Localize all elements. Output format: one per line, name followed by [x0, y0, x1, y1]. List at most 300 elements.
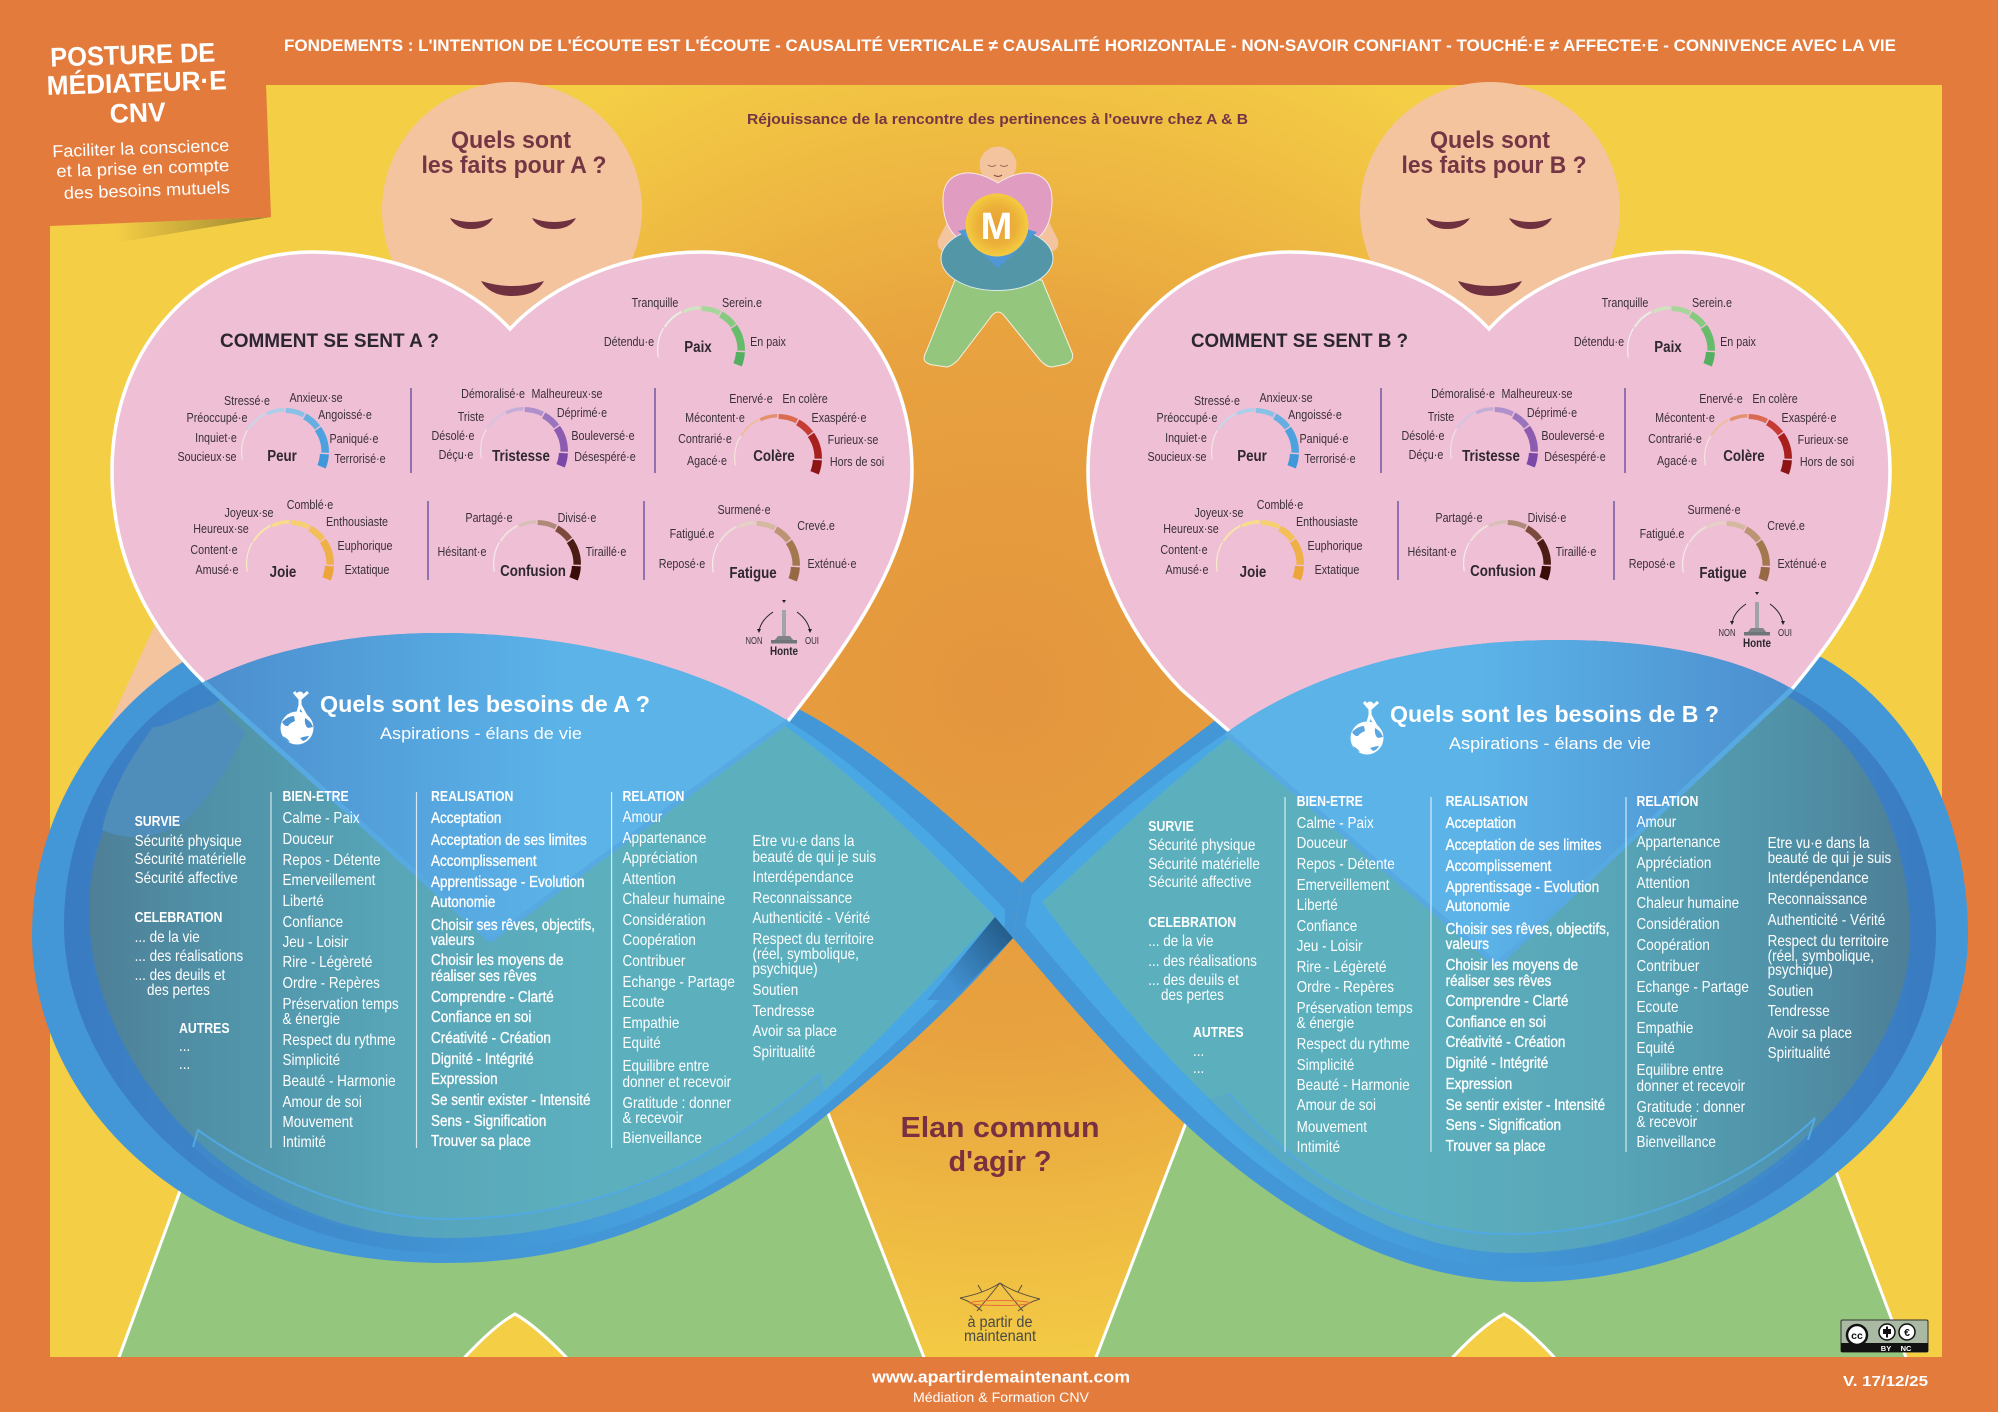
gauge: Peur: Peur	[267, 448, 297, 465]
gauge: Honte: Honte	[770, 646, 798, 658]
needs A: réalisation: Acceptation	[431, 810, 501, 827]
icon: person on globe A	[280, 692, 314, 744]
needs B: bien-être: Calme - Paix	[1297, 815, 1374, 832]
needs B: bien-être: Jeu - Loisir	[1297, 938, 1363, 955]
loop B inner area	[1042, 650, 1910, 1253]
needs A: réalisation: Acceptation de ses limites	[431, 832, 587, 849]
gauge: Tristesse B: Déçu·e	[1409, 448, 1443, 462]
gauge: Joie: Heureux·se	[193, 522, 249, 536]
needs A: bien-être: Respect du rythme	[282, 1032, 396, 1049]
footer: tagline: Médiation & Formation CNV	[913, 1390, 1089, 1405]
gauge: Peur B: Inquiet·e	[1165, 431, 1207, 445]
icon: M badge: M	[981, 206, 1012, 248]
gauge: Colère B: Agacé·e	[1657, 454, 1697, 468]
heart B contents	[1147, 296, 1854, 650]
needs A: réalisation: Se sentir exister - Intensité	[431, 1092, 591, 1109]
needs A: bien-être: Rire - Légèreté	[282, 954, 372, 971]
licence badge	[1841, 1320, 1928, 1353]
loop B outer band	[1013, 640, 1968, 1282]
needs A: relation suite: Etre vu·e dans la	[752, 833, 855, 850]
gauge: Joie: Content·e	[190, 543, 238, 557]
needs A: réalisation: Sens - Signification	[431, 1113, 546, 1130]
gauge: Colère: Exaspéré·e	[812, 411, 866, 425]
gauge: Peur: Stressé·e	[224, 394, 270, 408]
needs A: réalisation: Choisir ses rêves, objectifs,	[431, 917, 595, 934]
gauge: Honte: NON	[746, 636, 762, 647]
needs A: bien-être: Intimité	[282, 1134, 326, 1151]
needs A dividers	[271, 792, 612, 1148]
needs B: réalisation: REALISATION	[1446, 793, 1528, 809]
needs B: relation: Amour	[1636, 814, 1676, 831]
gauge: Paix B: En paix	[1720, 335, 1756, 349]
needs A: réalisation: Autonomie	[431, 894, 495, 911]
needs B: bien-être: Douceur	[1297, 835, 1348, 852]
heading: comment se sent A: COMMENT SE SENT A ?	[220, 331, 439, 352]
needs B: relation suite: Interdépendance	[1768, 870, 1869, 887]
needs A: réalisation: REALISATION	[431, 788, 513, 804]
gauge: Joie B: Joyeux·se	[1195, 506, 1243, 520]
lens V stripes	[204, 682, 1792, 965]
needs B: relation: RELATION	[1636, 793, 1698, 809]
gauge: Tristesse B: Tristesse	[1462, 448, 1520, 465]
gauge: Confusion: Confusion	[500, 563, 566, 580]
ribbon line A	[193, 1074, 823, 1219]
gauge: Colère B: Furieux·se	[1798, 433, 1848, 447]
gauge: Confusion: Partagé·e	[465, 511, 513, 525]
needs A: survie, célébration, autres: Sécurité matérielle	[135, 851, 246, 868]
needs A: survie, célébration, autres: Sécurité affective	[135, 870, 238, 887]
gauge: Tristesse: Déçu·e	[439, 448, 473, 462]
gauge: Joie: Enthousiaste	[326, 515, 388, 529]
gauge: Colère: Contrarié·e	[678, 432, 732, 446]
needs A: bien-être: Ordre - Repères	[282, 975, 380, 992]
question: faits B	[1402, 127, 1586, 179]
subheading: aspirations B: Aspirations - élans de vie	[1449, 734, 1651, 753]
needs A: bien-être: Mouvement	[282, 1114, 353, 1131]
gauge: Paix: Tranquille	[632, 296, 678, 310]
gauge: Peur B: Stressé·e	[1194, 394, 1240, 408]
gauge: Peur: Angoissé·e	[318, 408, 372, 422]
figure B: head	[1360, 82, 1620, 338]
needs A: réalisation: Accomplissement	[431, 853, 537, 870]
needs B: survie, célébration, autres: ...	[1193, 1043, 1204, 1060]
needs A: relation suite: Interdépendance	[752, 869, 854, 886]
gauge: Joie: Joie	[270, 564, 296, 581]
gauge: Fatigue B: Exténué·e	[1778, 557, 1826, 571]
needs B: réalisation: Confiance en soi	[1446, 1014, 1546, 1031]
licence badge: €	[1904, 1327, 1910, 1339]
needs B: bien-être: Préservation temps	[1297, 1000, 1413, 1017]
gauge: Confusion B: Tiraillé·e	[1556, 545, 1596, 559]
gauge: Peur B	[1147, 391, 1356, 467]
badge subtitle	[52, 136, 230, 203]
gauge: Peur B: Paniqué·e	[1300, 432, 1348, 446]
gauge: Joie: Comblé·e	[287, 498, 333, 512]
needs A: relation: Attention	[622, 871, 676, 888]
figure A: head	[107, 82, 642, 729]
shadow of arm in loop A	[102, 703, 245, 837]
gauge: Colère B	[1648, 392, 1854, 473]
gauge: Tristesse: Malheureux·se	[531, 387, 603, 401]
needs A: relation: donner et recevoir	[622, 1074, 731, 1091]
needs B: survie, célébration, autres: ... de la vie	[1148, 933, 1213, 950]
needs B: réalisation: Acceptation de ses limites	[1446, 837, 1601, 854]
needs B: réalisation	[1446, 793, 1610, 1155]
needs A: bien-être: Calme - Paix	[282, 810, 360, 827]
figure A: green legs	[118, 940, 925, 1360]
ribbon band A	[193, 1074, 825, 1238]
gauge: Colère: Mécontent·e	[685, 411, 745, 425]
needs B: relation: Considération	[1636, 916, 1720, 933]
needs A: survie, célébration, autres: des pertes	[147, 982, 210, 999]
gauge: Honte	[746, 600, 819, 658]
needs A: bien-être: Douceur	[282, 831, 334, 848]
gauge: Joie: Extatique	[345, 563, 389, 577]
needs B: relation: & recevoir	[1636, 1114, 1697, 1131]
needs A: relation: Bienveillance	[622, 1130, 702, 1147]
needs B: réalisation: réaliser ses rêves	[1446, 973, 1551, 990]
gauge: Fatigue B: Reposé·e	[1629, 557, 1675, 571]
gauge: Tristesse B: Déprimé·e	[1527, 406, 1577, 420]
heading: besoins A: Quels sont les besoins de A ?	[320, 691, 650, 717]
needs B: survie, célébration, autres: CELEBRATION	[1148, 914, 1236, 930]
gauge: Colère	[678, 392, 884, 473]
question: faits B: Quels sont	[1430, 127, 1550, 154]
needs B: réalisation: Choisir les moyens de	[1446, 957, 1578, 974]
needs B: relation: Ecoute	[1636, 999, 1678, 1016]
needs B: relation suite: Tendresse	[1768, 1003, 1830, 1020]
gauge: Paix: Détendu·e	[604, 335, 654, 349]
needs B: bien-être: Repos - Détente	[1297, 856, 1395, 873]
needs B: réalisation: Trouver sa place	[1446, 1138, 1545, 1155]
gauge: Tristesse: Bouleversé·e	[571, 429, 635, 443]
needs A: réalisation: Expression	[431, 1071, 498, 1088]
ribbon line B	[1229, 1093, 1815, 1234]
needs B: bien-être: & énergie	[1297, 1015, 1354, 1032]
needs A: réalisation: Apprentissage - Evolution	[431, 874, 585, 891]
needs A: survie, célébration, autres	[135, 813, 246, 1073]
gauge: Tristesse B: Malheureux·se	[1501, 387, 1573, 401]
gauge: Joie B: Heureux·se	[1163, 522, 1219, 536]
needs B: relation: Appartenance	[1636, 834, 1720, 851]
needs A: relation: & recevoir	[622, 1110, 683, 1127]
headline: réjouissance: Réjouissance de la rencontre des pertinences à l'oeuvre chez A & B	[747, 111, 1248, 128]
gauge: Confusion	[438, 511, 626, 580]
gauge: Joie B: Extatique	[1315, 563, 1359, 577]
needs B: survie, célébration, autres	[1148, 818, 1260, 1077]
question: faits B: les faits pour B ?	[1402, 152, 1586, 179]
question: élan commun	[900, 1112, 1100, 1178]
needs B: bien-être: Emerveillement	[1297, 877, 1389, 894]
gauge: Peur	[177, 391, 386, 467]
gauge: Peur: Préoccupé·e	[187, 411, 247, 425]
needs A: relation: Appartenance	[622, 830, 706, 847]
gauge: Colère B: Hors de soi	[1800, 455, 1854, 469]
needs A: relation	[622, 788, 735, 1147]
licence badge: BY	[1881, 1344, 1891, 1353]
question: faits A: les faits pour A ?	[422, 152, 606, 179]
gauge: Fatigue: Exténué·e	[808, 557, 856, 571]
gauge: Tristesse B: Démoralisé·e	[1431, 387, 1495, 401]
needs B: survie, célébration, autres: Sécurité physique	[1148, 837, 1255, 854]
needs B: réalisation: Accomplissement	[1446, 858, 1551, 875]
gauge: Peur: Soucieux·se	[177, 450, 237, 464]
gauge: Colère B: Exaspéré·e	[1782, 411, 1836, 425]
gauge: Colère B: Mécontent·e	[1655, 411, 1715, 425]
gauge: Peur B: Soucieux·se	[1147, 450, 1207, 464]
gauge: Confusion: Tiraillé·e	[586, 545, 626, 559]
gauge: Colère: Enervé·e	[729, 392, 773, 406]
needs A: relation: Gratitude : donner	[622, 1095, 731, 1112]
needs B: bien-être: Ordre - Repères	[1297, 979, 1394, 996]
needs A: relation suite: Reconnaissance	[752, 890, 852, 907]
needs A: bien-être: Beauté - Harmonie	[282, 1073, 396, 1090]
gauge: Joie B: Euphorique	[1308, 539, 1362, 553]
needs B: réalisation: valeurs	[1446, 936, 1489, 953]
gauge: Tristesse: Démoralisé·e	[461, 387, 525, 401]
gauge: Fatigue: Crevé.e	[797, 519, 835, 533]
needs B: survie, célébration, autres: AUTRES	[1193, 1024, 1244, 1040]
heart A	[112, 252, 912, 940]
loop A inner area	[89, 640, 995, 1238]
gauge: Joie B: Comblé·e	[1257, 498, 1303, 512]
gauge: Joie: Joyeux·se	[225, 506, 273, 520]
needs B: bien-être: Beauté - Harmonie	[1297, 1077, 1410, 1094]
needs B: réalisation: Apprentissage - Evolution	[1446, 879, 1599, 896]
needs A: relation: Contribuer	[622, 953, 686, 970]
needs B: relation: Equité	[1636, 1040, 1675, 1057]
heading: besoins B: Quels sont les besoins de B ?	[1390, 701, 1719, 727]
needs B: survie, célébration, autres: SURVIE	[1148, 818, 1194, 834]
gauge: Colère B: Colère	[1723, 448, 1765, 465]
gauge: Paix B	[1574, 296, 1756, 365]
needs B: relation: Echange - Partage	[1636, 979, 1749, 996]
gauge dividers	[411, 388, 655, 580]
needs A: relation suite: Avoir sa place	[752, 1023, 837, 1040]
licence badge: cc	[1851, 1330, 1863, 1342]
gauge: Paix: Paix	[684, 339, 712, 356]
heart A contents	[177, 296, 884, 658]
needs A: relation suite: Soutien	[752, 982, 798, 999]
gauge: Joie	[190, 498, 392, 581]
needs A: bien-être: Préservation temps	[282, 996, 399, 1013]
needs A: réalisation: Choisir les moyens de	[431, 952, 564, 969]
gauge: Confusion B: Partagé·e	[1435, 511, 1483, 525]
needs B: bien-être: Mouvement	[1297, 1119, 1367, 1136]
gauge: Paix B: Tranquille	[1602, 296, 1648, 310]
needs B: réalisation: Autonomie	[1446, 898, 1510, 915]
logo: à partir de maintenant: maintenant	[964, 1328, 1037, 1345]
needs A: bien-être	[282, 788, 399, 1151]
mediator figure	[924, 146, 1073, 367]
gauge: Joie: Euphorique	[338, 539, 392, 553]
needs A: survie, célébration, autres: AUTRES	[179, 1020, 230, 1036]
needs B: survie, célébration, autres: ... des deuils et	[1148, 972, 1239, 989]
gauge: Fatigue: Surmené·e	[717, 503, 771, 517]
gauge: Paix B: Paix	[1654, 339, 1682, 356]
needs A: relation suite: Respect du territoire	[752, 931, 874, 948]
figure B: gap between legs	[1453, 1314, 1554, 1360]
badge title: MÉDIATEUR·E	[46, 64, 227, 101]
needs B: relation suite: Respect du territoire	[1768, 933, 1889, 950]
needs B: relation suite: Soutien	[1768, 983, 1813, 1000]
needs B: relation suite: psychique)	[1768, 962, 1833, 979]
needs B: relation: Bienveillance	[1636, 1134, 1716, 1151]
badge subtitle: des besoins mutuels	[64, 178, 230, 203]
needs A: survie, célébration, autres: ... des deuils et	[135, 967, 225, 984]
top fold shadow	[115, 217, 271, 243]
gauge: Fatigue B: Surmené·e	[1687, 503, 1741, 517]
gauge: Paix B: Détendu·e	[1574, 335, 1624, 349]
gauge: Joie B	[1160, 498, 1362, 581]
needs A: réalisation: Dignité - Intégrité	[431, 1051, 534, 1068]
question: élan commun: d'agir ?	[948, 1146, 1052, 1178]
gauge: Honte B: OUI	[1778, 628, 1792, 639]
gauge: Peur: Terrorisé·e	[334, 452, 386, 466]
needs A: bien-être: Repos - Détente	[282, 852, 381, 869]
needs B: bien-être: BIEN-ETRE	[1297, 793, 1363, 809]
gauge: Confusion B	[1408, 511, 1596, 580]
badge title: CNV	[109, 97, 166, 129]
needs A: relation: Coopération	[622, 932, 696, 949]
needs B: relation suite: Etre vu·e dans la	[1768, 835, 1870, 852]
needs B: relation: Empathie	[1636, 1020, 1693, 1037]
needs A: relation: Considération	[622, 912, 706, 929]
needs B: relation: Contribuer	[1636, 958, 1700, 975]
badge title	[46, 37, 227, 129]
needs B: relation suite: Reconnaissance	[1768, 891, 1867, 908]
needs A: réalisation	[431, 788, 595, 1150]
needs A: relation: RELATION	[622, 788, 684, 804]
needs A: bien-être: & énergie	[282, 1011, 340, 1028]
needs B: survie, célébration, autres: Sécurité matérielle	[1148, 856, 1260, 873]
needs A: bien-être: Emerveillement	[282, 872, 375, 889]
needs A: bien-être: BIEN-ETRE	[282, 788, 349, 804]
gauge: Peur B: Angoissé·e	[1288, 408, 1342, 422]
needs B: relation suite: Authenticité - Vérité	[1768, 912, 1885, 929]
gauge: Joie: Amusé·e	[196, 563, 238, 577]
needs A: survie, célébration, autres: CELEBRATION	[135, 909, 222, 925]
gauge: Paix B: Serein.e	[1692, 296, 1732, 310]
gauge: Confusion B: Confusion	[1470, 563, 1536, 580]
gauge: Tristesse B: Désolé·e	[1402, 429, 1444, 443]
needs A: relation suite	[752, 833, 876, 1061]
gauge: Fatigue B	[1629, 503, 1826, 582]
gauge: Tristesse: Désespéré·e	[574, 450, 636, 464]
gauge: Tristesse B: Bouleversé·e	[1541, 429, 1605, 443]
gauge: Fatigue	[659, 503, 856, 582]
needs A: relation: Equité	[622, 1035, 661, 1052]
question: faits A: Quels sont	[451, 127, 571, 154]
gauge: Joie B: Content·e	[1160, 543, 1208, 557]
gauge: Honte B	[1718, 592, 1792, 650]
footer: website: www.apartirdemaintenant.com	[871, 1368, 1130, 1386]
needs B: bien-être: Rire - Légèreté	[1297, 959, 1386, 976]
loop A mid band	[64, 633, 1005, 1253]
needs A: réalisation: Trouver sa place	[431, 1133, 531, 1150]
needs B: relation: Equilibre entre	[1636, 1062, 1723, 1079]
needs A: relation suite: Authenticité - Vérité	[752, 910, 870, 927]
needs A: relation: Empathie	[622, 1015, 679, 1032]
needs A: relation: Chaleur humaine	[622, 891, 725, 908]
gauge: Fatigue: Fatigué.e	[670, 527, 714, 541]
header: fondements: FONDEMENTS : L'INTENTION DE L'ÉCOUTE EST L'ÉCOUTE - CAUSALITÉ VERTICALE ≠ CAUSALITÉ HORIZONTALE - NON-SAVOIR CONFIANT - TOUCHÉ·E ≠ AFFECTE·E - CONNIVENCE AVEC LA VIE	[284, 36, 1896, 55]
ribbon band B	[1205, 1093, 1815, 1253]
needs B: bien-être: Confiance	[1297, 918, 1357, 935]
needs A: relation suite: Spiritualité	[752, 1044, 815, 1061]
badge subtitle: Faciliter la conscience	[52, 136, 230, 161]
gauge: Honte B: NON	[1718, 628, 1736, 639]
subheading: aspirations A: Aspirations - élans de vie	[380, 724, 582, 743]
gauge: Colère: Agacé·e	[687, 454, 727, 468]
needs A: relation suite: beauté de qui je suis	[752, 849, 876, 866]
needs A: relation: Echange - Partage	[622, 974, 735, 991]
badge title: POSTURE DE	[50, 37, 216, 73]
needs B: relation suite: beauté de qui je suis	[1768, 850, 1891, 867]
needs A: réalisation: valeurs	[431, 932, 474, 949]
needs B: relation: Appréciation	[1636, 855, 1711, 872]
gauge: Tristesse	[432, 387, 636, 466]
needs B: survie, célébration, autres: ... des réalisations	[1148, 953, 1257, 970]
needs A: bien-être: Liberté	[282, 893, 324, 910]
needs B: relation suite	[1768, 835, 1891, 1062]
gauge: Paix	[604, 296, 786, 365]
gauge: Paix: Serein.e	[722, 296, 762, 310]
gauge: Fatigue: Fatigue	[729, 565, 777, 582]
needs A: survie, célébration, autres: Sécurité physique	[135, 833, 242, 850]
needs B: bien-être	[1297, 793, 1413, 1156]
needs A: réalisation: Comprendre - Clarté	[431, 989, 554, 1006]
needs B: relation suite: Avoir sa place	[1768, 1025, 1852, 1042]
gauge: Peur: Inquiet·e	[195, 431, 237, 445]
heart B	[1088, 252, 1890, 965]
needs A: relation: Appréciation	[622, 850, 697, 867]
needs B: relation suite: Spiritualité	[1768, 1045, 1831, 1062]
loop A outer band	[32, 632, 1022, 1263]
icon: person on globe B	[1350, 702, 1384, 754]
gauge: Colère B: En colère	[1752, 392, 1798, 406]
loop B mid band	[1025, 640, 1936, 1268]
gauge: Paix: En paix	[750, 335, 786, 349]
gauge: Honte B: Honte	[1743, 638, 1771, 650]
question: faits A	[422, 127, 606, 179]
needs A: bien-être: Simplicité	[282, 1052, 340, 1069]
gauge: Colère B: Enervé·e	[1699, 392, 1743, 406]
needs B: réalisation: Choisir ses rêves, objectifs,	[1446, 921, 1610, 938]
needs A: relation suite: Tendresse	[752, 1003, 815, 1020]
question: élan commun: Elan commun	[900, 1112, 1100, 1144]
gauge: Peur B: Anxieux·se	[1259, 391, 1313, 405]
gauge: Peur: Paniqué·e	[330, 432, 378, 446]
gauge: Colère: En colère	[782, 392, 828, 406]
figure A: gap between legs	[465, 1314, 566, 1360]
gauge: Colère: Furieux·se	[828, 433, 878, 447]
needs A: survie, célébration, autres: SURVIE	[135, 813, 180, 829]
gauge: Confusion B: Hésitant·e	[1408, 545, 1456, 559]
gauge: Tristesse: Tristesse	[492, 448, 550, 465]
needs A: bien-être: Jeu - Loisir	[282, 934, 349, 951]
lens A: heart and needs overlap	[204, 633, 788, 940]
gauge: Tristesse: Déprimé·e	[557, 406, 607, 420]
needs B: bien-être: Respect du rythme	[1297, 1036, 1410, 1053]
gauge: Joie B: Enthousiaste	[1296, 515, 1358, 529]
needs B: réalisation: Créativité - Création	[1446, 1034, 1565, 1051]
footer bar	[0, 1357, 1998, 1412]
needs B: bien-être: Intimité	[1297, 1139, 1340, 1156]
needs B: bien-être: Liberté	[1297, 897, 1338, 914]
gauge: Joie B: Joie	[1240, 564, 1266, 581]
needs A: relation suite: (réel, symbolique,	[752, 946, 859, 963]
